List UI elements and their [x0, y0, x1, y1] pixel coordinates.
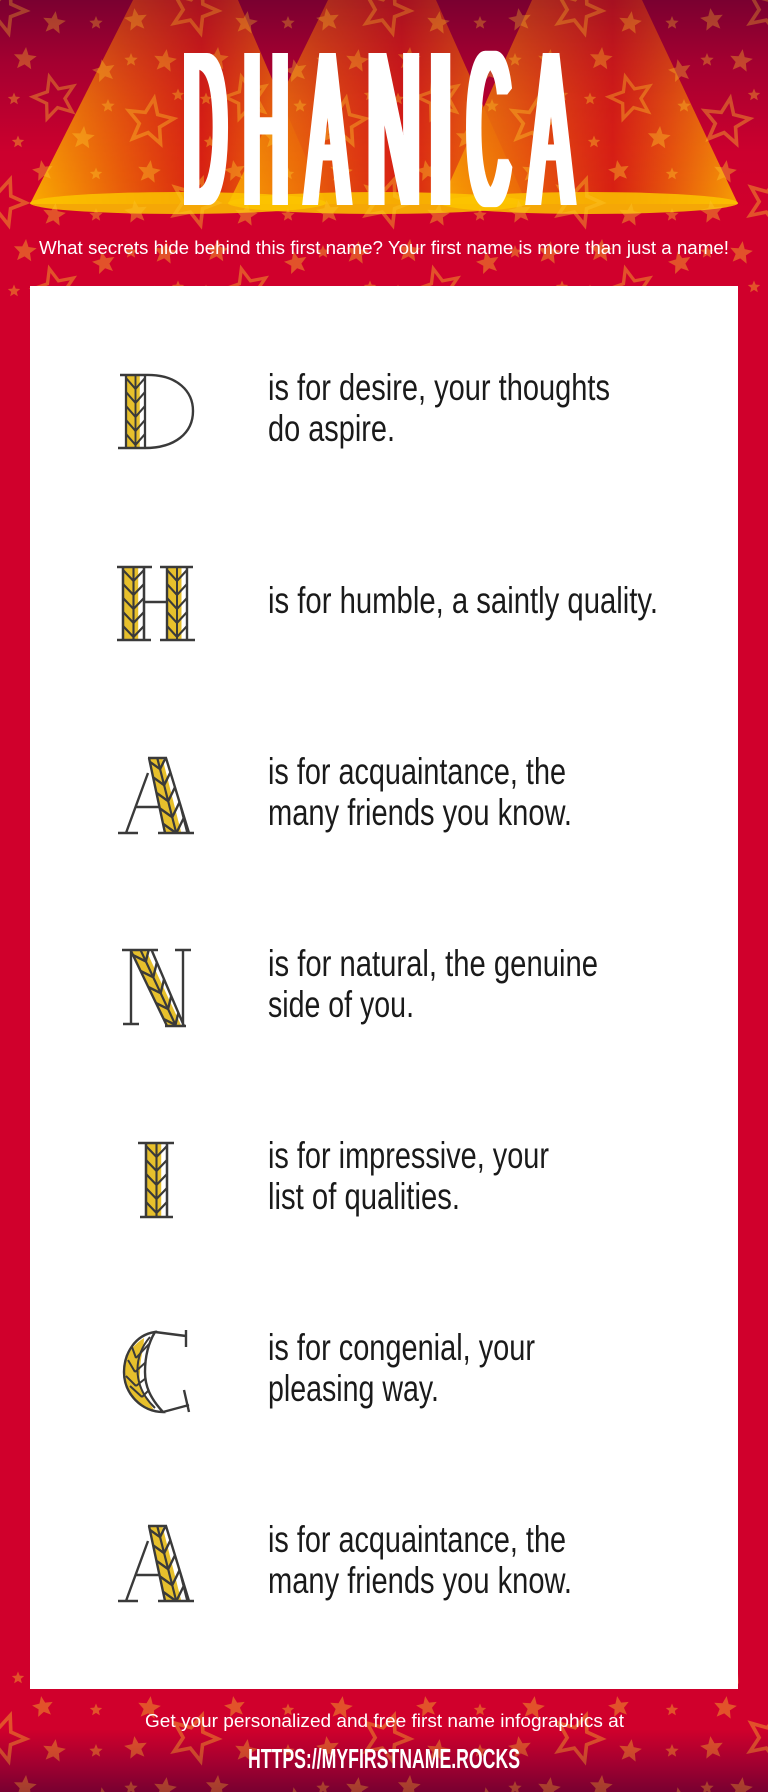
row D	[118, 367, 610, 449]
text H: is for humble, a saintly quality.	[268, 580, 658, 621]
icon: letter C	[124, 1330, 189, 1412]
text A: many friends you know.	[268, 792, 572, 833]
spotlight pools	[30, 192, 738, 214]
subtitle: What secrets hide behind this first name? Your first name is more than just a name!	[39, 238, 729, 258]
footer text: Get your personalized and free first name infographics at	[145, 1711, 624, 1731]
title: H	[244, 6, 288, 253]
spotlight center	[228, 0, 527, 204]
text N	[268, 943, 598, 1025]
text A second	[268, 1519, 572, 1601]
text D: is for desire, your thoughts	[268, 367, 610, 408]
text I: is for impressive, your	[268, 1135, 549, 1176]
icon: letter H	[117, 567, 195, 641]
spotlights	[30, 0, 738, 204]
text I: list of qualities.	[268, 1176, 460, 1217]
text D: do aspire.	[268, 408, 395, 449]
text A	[268, 751, 572, 833]
text N: is for natural, the genuine	[268, 943, 598, 984]
row A	[118, 750, 572, 840]
text C: pleasing way.	[268, 1368, 439, 1409]
row C	[124, 1327, 535, 1412]
icon: letter N	[122, 948, 191, 1028]
icon: letter A	[118, 750, 194, 840]
spotlight right	[440, 0, 738, 204]
row H	[117, 567, 658, 641]
text N: side of you.	[268, 984, 414, 1025]
text C: is for congenial, your	[268, 1327, 535, 1368]
icon: letter A second	[118, 1518, 194, 1608]
footer url: HTTPS://MYFIRSTNAME.ROCKS	[248, 1743, 520, 1774]
star pattern top	[0, 0, 768, 298]
row I	[138, 1135, 549, 1217]
title: C	[468, 7, 510, 253]
text I	[268, 1135, 549, 1217]
text A second: is for acquaintance, the	[268, 1519, 566, 1560]
title: D	[184, 7, 226, 253]
row A second	[118, 1518, 572, 1608]
text A: is for acquaintance, the	[268, 751, 566, 792]
row N	[122, 948, 597, 1028]
title: I	[427, 7, 455, 253]
white panel	[30, 286, 738, 1689]
text D	[268, 367, 610, 449]
title: A	[307, 6, 348, 253]
text A second: many friends you know.	[268, 1560, 572, 1601]
title: A	[530, 6, 572, 253]
icon: letter I	[138, 1143, 174, 1217]
star pattern bottom	[0, 1668, 768, 1792]
spotlight left	[30, 0, 326, 204]
title	[184, 5, 572, 253]
text C	[268, 1327, 535, 1409]
icon: letter D	[118, 375, 193, 449]
title: N	[368, 5, 420, 252]
